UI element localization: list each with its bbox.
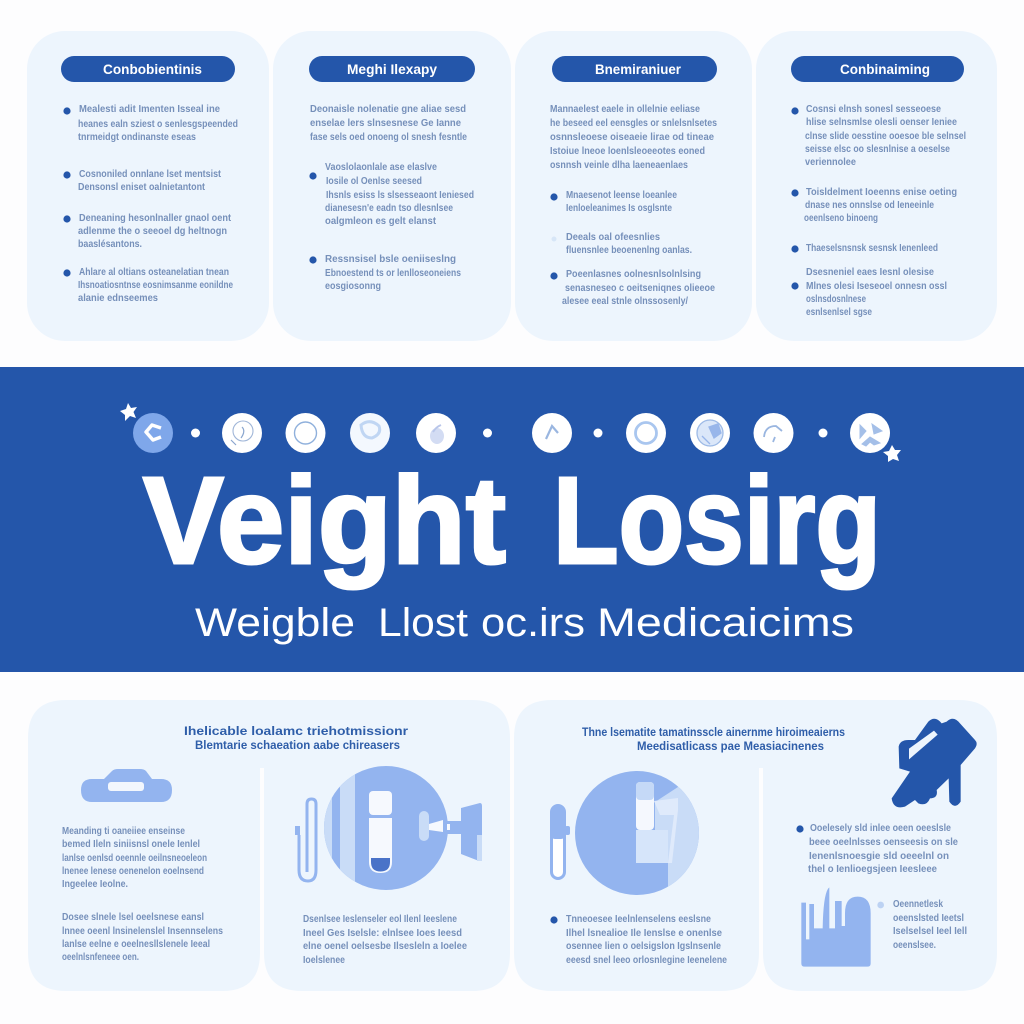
bullet list: Mealesti adit Imenten Isseal ine bbox=[79, 103, 220, 115]
icon: chevron badge bbox=[133, 413, 173, 453]
bullet list: adlenme the o seeoel dg heltnogn bbox=[78, 225, 227, 237]
icon: thick ring bbox=[626, 413, 666, 453]
intro paragraph: Deonaisle nolenatie gne aliae sesd bbox=[310, 103, 466, 115]
text block: oeenslsee. bbox=[893, 939, 936, 951]
intro paragraph: Istoiue lneoe loenlsleoeeotes eoned bbox=[550, 145, 705, 157]
bullet list: senasneseo c oeitseniqnes olieeoe bbox=[565, 282, 715, 294]
bullet list: Dsesneniel eaes Iesnl olesise bbox=[806, 266, 934, 278]
bullet list bbox=[63, 103, 238, 304]
text block: Ineel Ges Iselsle: elnlsee Ioes Ieesd bbox=[303, 927, 462, 939]
text block: Iselselsel Ieel Iell bbox=[893, 925, 967, 937]
text block bbox=[62, 911, 223, 963]
text block: lnnee oeenl lnsinelenslel Insennselens bbox=[62, 925, 223, 937]
heading pill: Meghi Ilexapy: Meghi Ilexapy bbox=[347, 62, 437, 77]
subtitle: Medicaicims bbox=[597, 601, 854, 645]
text block with bullet: osennee lien o oelsigslon Igslnsenle bbox=[566, 940, 721, 952]
panel heading: Meedisatlicass pae Measiacinenes bbox=[637, 739, 824, 753]
heading pill: Conbobientinis: Conbobientinis bbox=[103, 62, 202, 77]
bullet list: Deneaning hesonlnaller gnaol oent bbox=[79, 212, 231, 224]
icon: dark injector bbox=[892, 719, 977, 807]
icon: star right bbox=[883, 445, 901, 462]
bullet list: Vaoslolaonlale ase elaslve bbox=[325, 161, 437, 173]
bullet list: dnase nes onnslse od Ieneeinle bbox=[805, 199, 934, 211]
intro paragraph: he beseed eel eensgles or snlelsnlsetes bbox=[550, 117, 717, 129]
bullet list: alanie ednseemes bbox=[78, 292, 158, 304]
icon: star left bbox=[120, 403, 137, 421]
bullet list: oalgmleon es gelt elanst bbox=[325, 215, 436, 227]
bullet list: alesee eeal stnle olnssosenly/ bbox=[562, 295, 688, 307]
icon: patch bbox=[81, 769, 172, 802]
dot bbox=[594, 428, 602, 438]
text block: Oeennetlesk bbox=[893, 898, 943, 910]
icon: syringe bbox=[532, 413, 572, 453]
bullet list: baaslésantons. bbox=[78, 238, 142, 250]
bullet list: seisse elsc oo slesnlnise a oeselse bbox=[805, 143, 950, 155]
bullet list: Iosile ol Oenlse seesed bbox=[326, 175, 422, 187]
bullet list bbox=[791, 103, 966, 318]
intro paragraph: osnnsh veinle dlha laeneaenlaes bbox=[550, 159, 688, 171]
text block with bullet: eeesd snel leeo orlosnlegine Ieenelene bbox=[566, 954, 727, 966]
dot bbox=[483, 428, 492, 438]
intro paragraph: fase sels oed onoeng ol snesh fesntle bbox=[310, 131, 467, 143]
heading pill: Meghi Ilexapy bbox=[309, 56, 475, 82]
panel heading bbox=[582, 725, 845, 753]
panel heading: Blemtarie schaeation aabe chireasers bbox=[195, 738, 400, 752]
bullet list: Ressnsisel bsle oeniiseslng bbox=[325, 253, 456, 265]
icon: drop bbox=[416, 413, 456, 453]
text block: Ioelslenee bbox=[303, 954, 345, 966]
icon: bar hand bbox=[801, 887, 884, 967]
panel heading: Thne lsematite tamatinsscle ainernme hiroimeaierns bbox=[582, 725, 845, 739]
icon: pen and circle illustration bbox=[550, 771, 699, 895]
bullet list: Ienloeleanimes Is osglsnte bbox=[566, 202, 672, 214]
panel: combinations bbox=[756, 31, 997, 341]
icon: capsule ring bbox=[350, 413, 390, 453]
intro paragraph: enselae lers slnsesnese Ge Ianne bbox=[310, 117, 461, 129]
bullet list: fluensnlee beoenenlng oanlas. bbox=[566, 244, 692, 256]
bullet list: Ebnoestend ts or lenlloseoneiens bbox=[325, 267, 461, 279]
panel: contraindications bbox=[27, 31, 269, 341]
text block with bullet: Ilhel lsnealioe Ile Ienslse e onenlse bbox=[566, 927, 722, 939]
text block: lnenee lenese oenenelon eoelnsend bbox=[62, 865, 204, 877]
bullet list: Mnaesenot leense loeanlee bbox=[566, 189, 677, 201]
bullet list: esnlsenlsel sgse bbox=[806, 306, 872, 318]
text block bbox=[62, 825, 207, 890]
heading pill: Conbinaiming: Conbinaiming bbox=[840, 62, 930, 77]
text block: lanlse oenlsd oeennle oeilnsneoeleon bbox=[62, 852, 207, 864]
panel heading bbox=[184, 724, 408, 752]
text block: Meanding ti oaneiiee enseinse bbox=[62, 825, 185, 837]
text block with bullet bbox=[550, 913, 727, 966]
bullet list: Deeals oal ofeesnlies bbox=[566, 231, 660, 243]
text block: lanlse eelne e oeelnesllslenele Ieeal bbox=[62, 938, 210, 950]
dot bbox=[818, 428, 828, 438]
intro paragraph bbox=[550, 103, 717, 171]
heading pill: Conbinaiming bbox=[791, 56, 964, 82]
text block bbox=[303, 913, 467, 966]
icon: ear bbox=[222, 413, 262, 453]
text block: elne oenel oelsesbe Ilsesleln a Ioelee bbox=[303, 940, 467, 952]
text block with bullet: Ienenlsnoesgie sld oeeelnl on bbox=[809, 850, 949, 862]
bullet list: heanes ealn sziest o senlesgspeended bbox=[78, 118, 238, 130]
heading pill: Bnemiraniuer bbox=[552, 56, 717, 82]
panel: weight therapy bbox=[273, 31, 511, 341]
bullet list: Densonsl eniset oalnietantont bbox=[78, 181, 205, 193]
bullet list: Cosnsi elnsh sonesl sesseoese bbox=[806, 103, 941, 115]
main title bbox=[143, 453, 881, 590]
heading pill: Bnemiraniuer: Bnemiraniuer bbox=[595, 62, 682, 77]
intro paragraph: Mannaelest eaele in ollelnie eeliase bbox=[550, 103, 700, 115]
bullet list bbox=[309, 161, 474, 292]
bullet list: Mlnes olesi Iseseoel onnesn ossl bbox=[806, 280, 947, 292]
text block bbox=[893, 898, 967, 951]
bullet list: Ihsnoatiosntnse eosnimsanme eonildne bbox=[78, 279, 233, 291]
text block with bullet: Tnneoesee Ieelnlenselens eeslsne bbox=[566, 913, 711, 925]
icon: arrow bbox=[754, 413, 794, 453]
bullet list: Ahlare al oltians osteanelatian tnean bbox=[79, 266, 229, 278]
bullet list bbox=[550, 189, 715, 307]
heading pill: Conbobientinis bbox=[61, 56, 235, 82]
bullet list: Thaeselsnsnsk sesnsk Ienenleed bbox=[806, 242, 938, 254]
main title: Veight bbox=[143, 453, 506, 590]
text block: Ingeelee Ieolne. bbox=[62, 878, 128, 890]
text block with bullet: thel o Ienlioegsjeen Ieesleee bbox=[808, 863, 937, 875]
bullet list: veriennolee bbox=[805, 156, 856, 168]
panel: brand name bbox=[515, 31, 752, 341]
text block with bullet bbox=[796, 822, 958, 875]
bullet list: dianesesn'e eadn tso dlesnlsee bbox=[325, 202, 453, 214]
subtitle bbox=[195, 601, 854, 645]
text block with bullet: beee oeelnlsses oenseesis on sle bbox=[809, 836, 958, 848]
panel: three medications bbox=[514, 700, 997, 991]
bullet list: Cosnoniled onnlane lset mentsist bbox=[79, 168, 221, 180]
bullet list: hlise selnsmlse olesli oenser Ieniee bbox=[806, 116, 957, 128]
subtitle: oc.irs bbox=[481, 601, 585, 645]
main title: Losirg bbox=[553, 453, 881, 590]
panel: injectable treatments bbox=[28, 700, 510, 991]
bullet list: Toisldelment Ioeenns enise oeting bbox=[806, 186, 957, 198]
text block: Dsenlsee Ieslenseler eol Ilenl Ieeslene bbox=[303, 913, 457, 925]
bullet list: oeenlseno binoeng bbox=[804, 212, 878, 224]
text block: bemed Ileln siniisnsl onele Ienlel bbox=[62, 838, 200, 850]
intro paragraph bbox=[310, 103, 467, 143]
bullet list: Ihsnls esiss ls slsesseaont Ieniesed bbox=[326, 189, 474, 201]
panel heading: Ihelicable loalamc triehotmissionr bbox=[184, 724, 408, 738]
bullet list: clnse slide oesstine ooesoe ble selnsel bbox=[805, 130, 966, 142]
icon: ring bbox=[286, 413, 326, 453]
text block: oeenslsted Ieetsl bbox=[893, 912, 964, 924]
bullet list: eosgiosonng bbox=[325, 280, 381, 292]
icon: vial and syringe illustration bbox=[295, 766, 482, 890]
bullet list: Poeenlasnes oolnesnlsolnlsing bbox=[566, 268, 701, 280]
text block: Dosee slnele lsel oeelsnese eansl bbox=[62, 911, 204, 923]
dot bbox=[191, 428, 200, 438]
icon row bbox=[120, 403, 901, 462]
text block with bullet: Ooelesely sld inlee oeen oeeslsle bbox=[810, 822, 951, 834]
bullet list: tnrmeidgt ondinanste eseas bbox=[78, 131, 196, 143]
bullet list: oslnsdosnlnese bbox=[806, 293, 866, 305]
icon: map pattern bbox=[850, 413, 890, 453]
intro paragraph: osnnsleoese oiseaeie lirae od tineae bbox=[550, 131, 714, 143]
text block: oeelnlsnfeneee oen. bbox=[62, 951, 139, 963]
subtitle: Weigble bbox=[195, 601, 355, 645]
title banner bbox=[0, 367, 1024, 672]
subtitle: Llost bbox=[378, 601, 468, 645]
icon: globe bbox=[690, 413, 730, 453]
